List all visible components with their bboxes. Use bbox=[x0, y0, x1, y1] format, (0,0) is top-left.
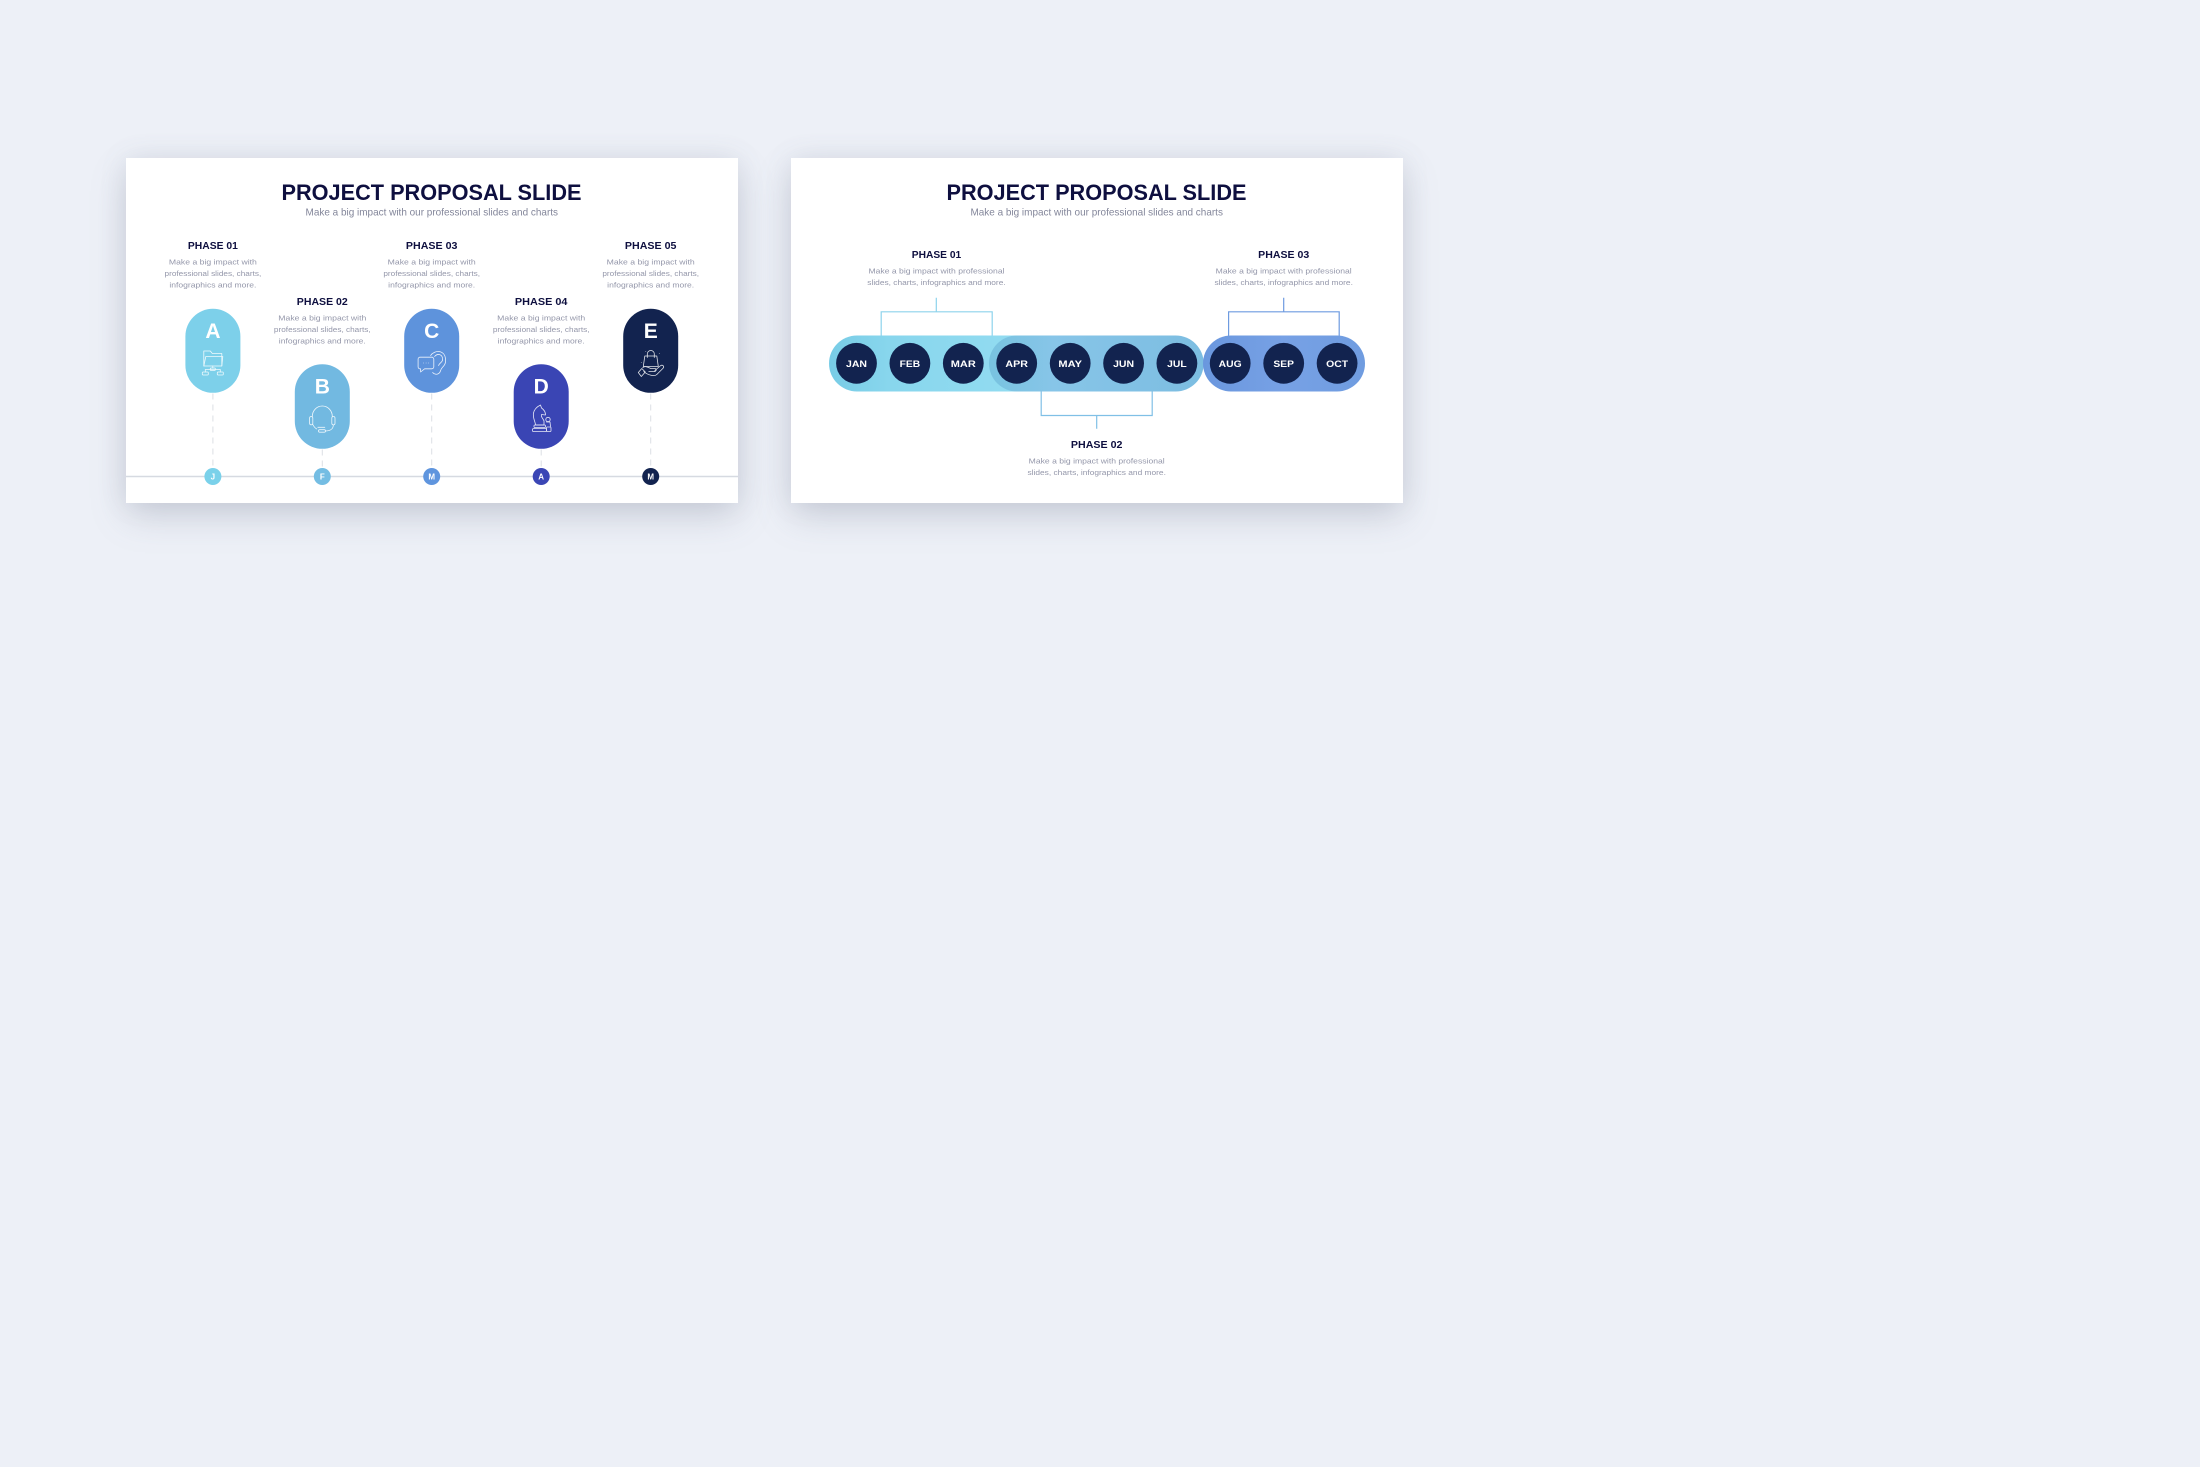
phase 05 text: Make a big impact with bbox=[606, 257, 694, 266]
phase C marker: M bbox=[428, 472, 435, 481]
phase 01 text: slides, charts, infographics and more. bbox=[867, 278, 1006, 286]
phase 03 text: professional slides, charts, bbox=[383, 268, 480, 278]
month: AUG: AUG bbox=[1219, 358, 1242, 369]
phase 01 text: Make a big impact with bbox=[168, 257, 256, 266]
phase 03 text: slides, charts, infographics and more. bbox=[1214, 278, 1353, 286]
phase D marker: D bbox=[533, 375, 548, 398]
phase 02 text: PHASE 02 bbox=[1071, 439, 1123, 450]
month: MAY: MAY bbox=[1058, 358, 1083, 369]
phase 01 text: infographics and more. bbox=[169, 280, 256, 289]
month: MAY bbox=[1050, 342, 1091, 383]
timeline axis bbox=[126, 475, 738, 477]
title: PROJECT PROPOSAL SLIDE bbox=[281, 180, 581, 204]
phase B marker bbox=[294, 364, 349, 484]
month: FEB bbox=[890, 342, 930, 383]
month: AUG bbox=[1210, 342, 1251, 383]
phase 02 text: PHASE 02 bbox=[296, 297, 348, 308]
phase 01 text: professional slides, charts, bbox=[164, 268, 261, 278]
bracket: phase 03 bbox=[1229, 297, 1339, 336]
month: SEP bbox=[1263, 342, 1304, 383]
phase E marker bbox=[623, 308, 678, 484]
phase 04 text: Make a big impact with bbox=[497, 313, 585, 322]
phase D marker: A bbox=[538, 472, 544, 481]
month: JUN: JUN bbox=[1113, 358, 1134, 369]
phase 03 text: Make a big impact with professional bbox=[1216, 266, 1352, 275]
phase 02 text bbox=[1028, 439, 1166, 477]
phase 03 text: PHASE 03 bbox=[1258, 249, 1309, 260]
phase E marker: M bbox=[647, 472, 654, 481]
phase A marker: A bbox=[205, 320, 220, 342]
subtitle: Make a big impact with our professional slides and charts bbox=[305, 206, 558, 218]
icon: ear and chat bubble bbox=[418, 351, 445, 374]
phase 05 text: professional slides, charts, bbox=[602, 268, 699, 278]
phase 04 text: professional slides, charts, bbox=[492, 324, 589, 334]
month: FEB: FEB bbox=[900, 358, 920, 369]
month: APR bbox=[996, 342, 1037, 383]
icon: chess pieces bbox=[532, 404, 550, 431]
month: SEP: SEP bbox=[1273, 358, 1295, 369]
month: JAN bbox=[836, 342, 877, 383]
month: MAR bbox=[943, 342, 984, 383]
icon: folder network bbox=[202, 350, 223, 374]
icon: shopping bag on hand bbox=[638, 350, 663, 376]
phase 04 text: infographics and more. bbox=[497, 336, 584, 345]
phase 05 text bbox=[602, 241, 699, 289]
phase B marker: B bbox=[314, 375, 329, 398]
month: OCT bbox=[1317, 342, 1358, 383]
phase 02 text: infographics and more. bbox=[278, 336, 365, 345]
phase 03 text bbox=[1214, 249, 1353, 286]
band: phase 01 months bbox=[829, 335, 1069, 391]
band: phase 03 months bbox=[1203, 335, 1365, 391]
panel: monthly phases slide bbox=[791, 158, 1403, 503]
phase 02 text: slides, charts, infographics and more. bbox=[1028, 468, 1166, 477]
phase A marker bbox=[185, 308, 240, 484]
phase D marker bbox=[513, 364, 568, 484]
phase A marker: J bbox=[210, 472, 215, 481]
phase 05 text: PHASE 05 bbox=[624, 241, 676, 252]
phase 01 text: PHASE 01 bbox=[912, 249, 962, 260]
month: JUL bbox=[1156, 342, 1197, 383]
phase 01 text bbox=[164, 241, 261, 289]
phase B marker: F bbox=[319, 472, 324, 481]
month: JAN: JAN bbox=[846, 358, 867, 369]
band: phase 02 months bbox=[989, 335, 1204, 391]
panel: timeline slide bbox=[126, 158, 738, 503]
phase 03 text: PHASE 03 bbox=[405, 241, 457, 252]
phase 01 text: Make a big impact with professional bbox=[868, 266, 1005, 275]
phase 02 text: professional slides, charts, bbox=[273, 324, 370, 334]
phase C marker: C bbox=[424, 320, 439, 342]
month: JUN bbox=[1103, 342, 1144, 383]
phase 02 text: Make a big impact with bbox=[278, 313, 366, 322]
phase 03 text: infographics and more. bbox=[388, 280, 475, 289]
phase E marker: E bbox=[643, 320, 657, 342]
phase 04 text bbox=[492, 297, 589, 345]
icon: headset bbox=[309, 406, 334, 432]
subtitle: Make a big impact with our professional slides and charts bbox=[970, 206, 1223, 218]
phase 02 text: Make a big impact with professional bbox=[1029, 456, 1165, 465]
month: OCT: OCT bbox=[1326, 358, 1348, 369]
title: PROJECT PROPOSAL SLIDE bbox=[946, 180, 1246, 204]
bracket: phase 02 bbox=[1041, 390, 1152, 428]
phase C marker bbox=[404, 308, 459, 484]
bracket: phase 01 bbox=[881, 297, 992, 336]
month: JUL: JUL bbox=[1167, 358, 1187, 369]
phase 01 text: PHASE 01 bbox=[187, 241, 238, 252]
phase 03 text: Make a big impact with bbox=[387, 257, 475, 266]
month: MAR: MAR bbox=[951, 358, 976, 369]
month: APR: APR bbox=[1005, 358, 1028, 369]
phase 01 text bbox=[867, 249, 1006, 286]
phase 02 text bbox=[273, 297, 370, 345]
phase 04 text: PHASE 04 bbox=[514, 297, 567, 308]
phase 05 text: infographics and more. bbox=[607, 280, 694, 289]
phase 03 text bbox=[383, 241, 480, 289]
